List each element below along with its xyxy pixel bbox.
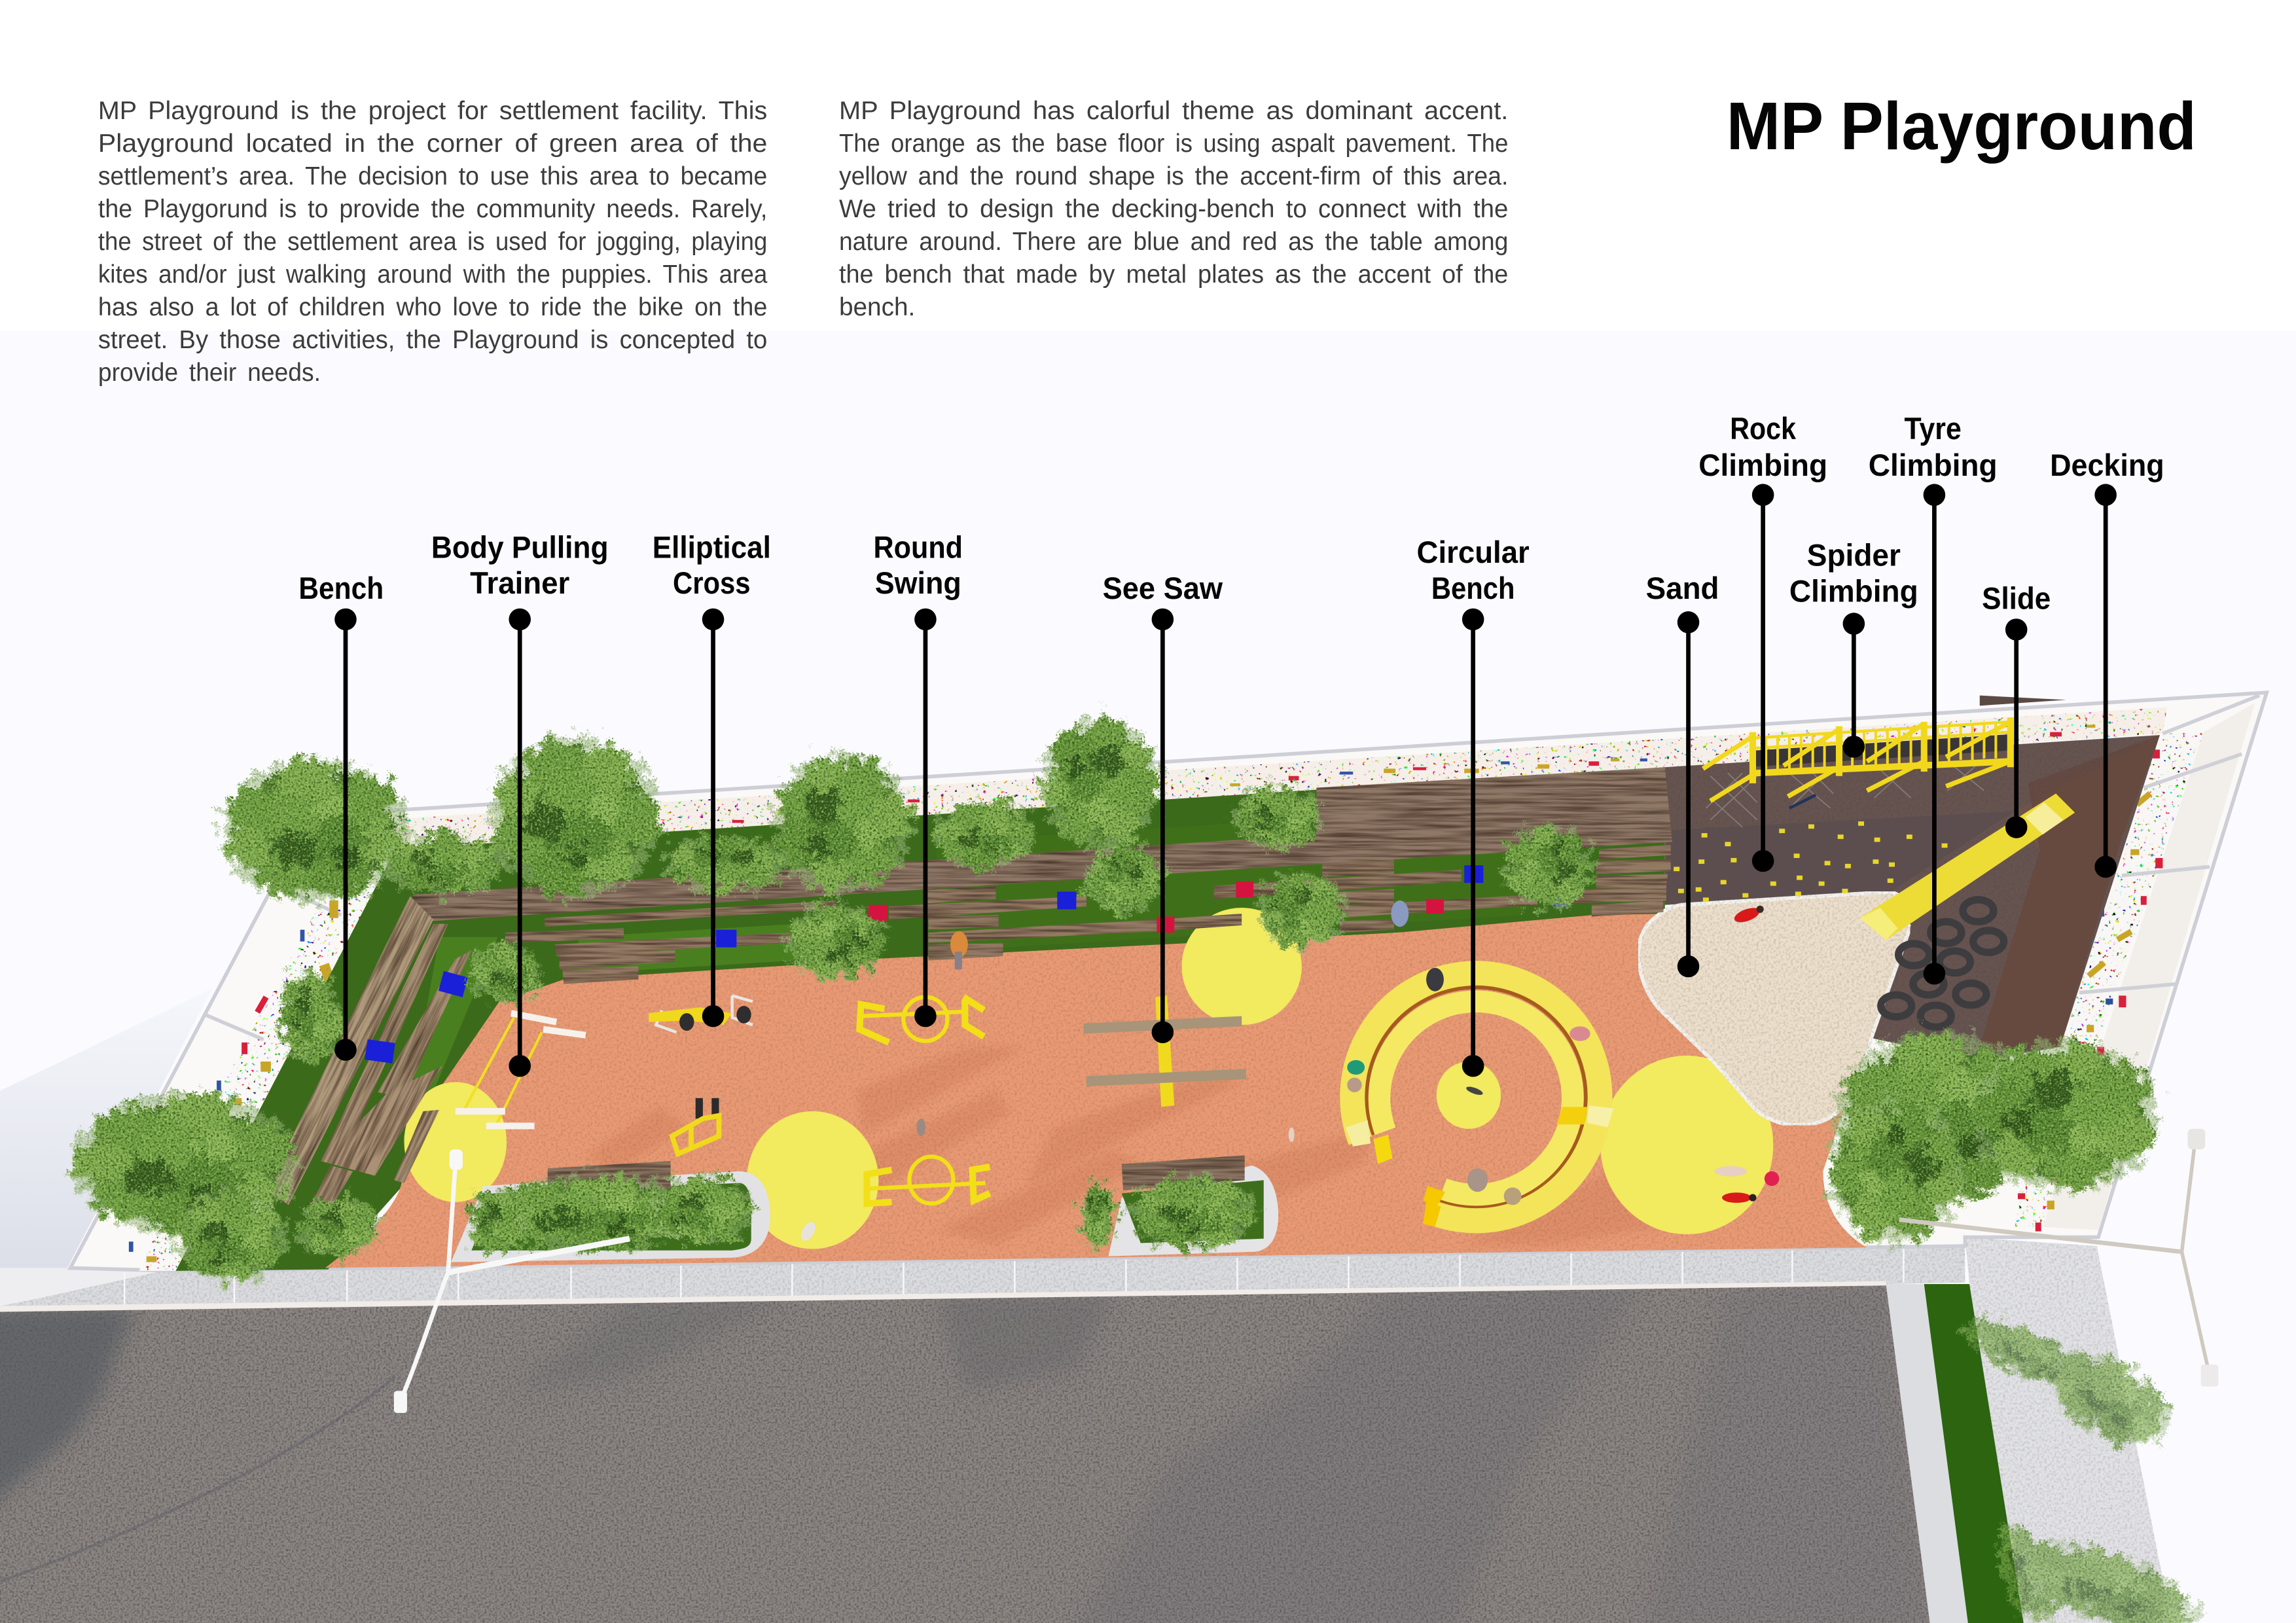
right street lamp <box>1899 1129 2218 1387</box>
yellow circles <box>404 908 1773 1249</box>
callout: sand: Sand <box>1646 571 1719 605</box>
callout: circular bench: Bench <box>1431 571 1515 605</box>
title: MP Playground <box>1727 88 2197 164</box>
tyre climbing <box>1881 900 2004 1027</box>
decking bench: left planks <box>141 815 597 1294</box>
callout: rock climbing: Climbing <box>1698 448 1827 482</box>
text block: theme description: nature around. There are blue and red as the table among <box>839 228 1508 256</box>
elliptical cross, upper <box>649 995 753 1032</box>
text block: theme description: The orange as the base floor is using aspalt pavement. The <box>839 130 1508 158</box>
callout: elliptical cross <box>653 529 771 1027</box>
callout: sand <box>1646 571 1719 977</box>
decking bench: back beam and main deck <box>410 767 1672 984</box>
callout: elliptical cross: Cross <box>673 565 751 600</box>
plaza ground plan <box>0 692 2267 1623</box>
callout: circular bench <box>1417 535 1530 1077</box>
callout: round swing: Round <box>874 529 963 564</box>
text block: theme description: MP Playground has calorful theme as dominant accent. <box>839 97 1508 125</box>
text block: project description: has also a lot of children who love to ride the bike on the <box>98 293 767 321</box>
wall colour specks <box>129 724 2162 1262</box>
callout: decking <box>2050 448 2164 878</box>
climbing nets <box>1706 758 1984 827</box>
sidewalk <box>0 1246 1965 1312</box>
people <box>798 795 1816 1243</box>
floor shadows <box>586 1047 1728 1245</box>
callout: rock climbing: Rock <box>1730 411 1797 446</box>
callout: rock climbing <box>1698 411 1827 872</box>
see saw <box>1084 995 1246 1107</box>
text block: theme description: bench. <box>839 293 915 321</box>
callout: elliptical cross: Elliptical <box>653 529 771 564</box>
text block: project description: street. By those activities, the Playground is concepted to <box>98 326 767 354</box>
red table cubes <box>869 882 1444 933</box>
text block: project description: Playground located in the corner of green area of the <box>98 130 767 158</box>
callout: tyre climbing: Tyre <box>1905 411 1962 446</box>
slide <box>1859 794 2075 940</box>
text block: project description: the street of the settlement area is used for jogging, playing <box>98 228 767 256</box>
text block: theme description: We tried to design the decking-bench to connect with the <box>839 195 1508 223</box>
spider climbing frame <box>1703 717 2011 801</box>
elliptical cross, lower <box>672 1098 719 1154</box>
callout: body pulling trainer: Body Pulling <box>431 529 609 564</box>
body pulling trainer <box>456 1013 586 1126</box>
perimeter wall <box>70 692 2267 1271</box>
text block: theme description <box>839 97 1508 321</box>
text block: theme description: the bench that made by metal plates as the accent of the <box>839 260 1508 289</box>
planter boxes <box>451 1155 1278 1262</box>
white text band <box>0 0 2296 331</box>
callout: round swing <box>874 529 963 1027</box>
callout: bench: Bench <box>298 571 384 605</box>
rock climbing and decking floor <box>1665 696 2160 1061</box>
callout: slide <box>1982 581 2051 838</box>
callout: slide: Slide <box>1982 581 2051 616</box>
grass beds <box>175 767 1665 1271</box>
street curb, grass strip and side path <box>1886 1237 2172 1623</box>
text block: project description: settlement’s area. The decision to use this area to became <box>98 162 767 190</box>
road asphalt <box>0 1284 1930 1623</box>
street-side trees <box>1954 1304 2210 1623</box>
callout: body pulling trainer <box>431 529 609 1077</box>
callout: body pulling trainer: Trainer <box>470 565 569 600</box>
left street lamp <box>394 1149 630 1413</box>
callout: round swing: Swing <box>875 565 961 600</box>
orange aspalt floor <box>325 914 1903 1268</box>
text block: theme description: yellow and the round shape is the accent-firm of this area. <box>839 162 1508 190</box>
circular bench <box>1346 973 1613 1227</box>
callout: circular bench: Circular <box>1417 535 1530 569</box>
text block: project description: the Playgorund is to provide the community needs. Rarely, <box>98 195 767 223</box>
callout: bench <box>298 571 384 1061</box>
rock climbing holds <box>1674 821 1948 902</box>
round swing, upper <box>859 997 984 1043</box>
callout: decking: Decking <box>2050 448 2164 482</box>
trees and shrubs <box>39 698 2195 1298</box>
blue table cubes <box>365 865 1570 1063</box>
round swing, lower <box>864 1156 990 1204</box>
callout: spider climbing <box>1789 538 1918 758</box>
text block: project description: kites and/or just walking around with the puppies. This area <box>98 260 768 289</box>
sand pit <box>1638 891 1910 1125</box>
text block: project description <box>98 97 768 387</box>
callout: tyre climbing <box>1869 411 1998 985</box>
callout: see saw: See Saw <box>1103 571 1223 605</box>
callout: spider climbing: Climbing <box>1789 574 1918 609</box>
callout: spider climbing: Spider <box>1807 538 1901 573</box>
callout: see saw <box>1103 571 1223 1043</box>
text block: project description: MP Playground is the project for settlement facility. This <box>98 97 767 125</box>
ground shadow at left <box>0 988 212 1268</box>
text block: project description: provide their needs. <box>98 359 321 387</box>
callout: tyre climbing: Climbing <box>1869 448 1998 482</box>
